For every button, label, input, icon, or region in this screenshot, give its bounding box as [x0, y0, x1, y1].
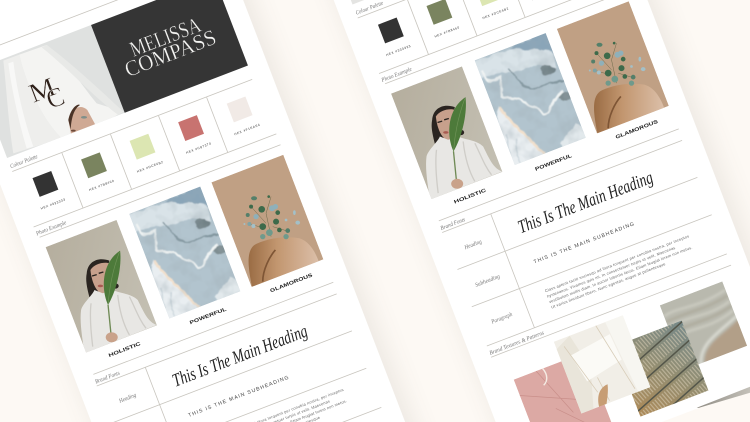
swatch: olive: HEX #7B8460 — [434, 25, 460, 39]
page fold shadow — [697, 387, 750, 408]
panel: right brand board page — [334, 0, 750, 422]
caption: holistic: HOLISTIC — [108, 341, 142, 359]
label: photo example: Photo Example — [35, 220, 68, 238]
texture: building facade — [632, 320, 708, 417]
rule under photo label — [385, 0, 626, 84]
paragraph sample: vestibulum mollis diam. In auctor lobortis lacus. Etiam feugiat lorem non metus. — [548, 245, 693, 304]
main heading sample: This Is The Main Heading — [170, 322, 311, 392]
label: brand textures and patterns: Brand Textures & Patterns — [489, 330, 546, 357]
swatch: blush: HEX #F1EAE6 — [234, 123, 261, 136]
swatch: charcoal — [30, 170, 66, 211]
logo block: Melissa Compass: COMPASS — [121, 24, 220, 82]
swatch: olive — [423, 0, 460, 39]
swatch: pale green — [471, 0, 510, 20]
swatch: pale green — [126, 132, 164, 174]
subheading sample: THIS IS THE MAIN SUBHEADING — [533, 221, 635, 265]
logo block: Melissa Compass: MELISSA — [126, 12, 204, 62]
swatch: pale green: HEX #DCE6B2 — [482, 6, 510, 20]
caption: glamorous: GLAMOROUS — [615, 119, 660, 141]
photo: back with eucalyptus — [212, 154, 324, 287]
row label: subheading: Subheading — [475, 274, 501, 289]
right page sheet — [176, 0, 750, 422]
texture: sea — [660, 282, 747, 364]
main heading sample: This Is The Main Heading — [515, 168, 656, 238]
swatch: charcoal: HEX #333333 — [40, 197, 66, 211]
swatch: blush — [223, 95, 261, 136]
photo: marble water — [474, 33, 586, 165]
caption: glamorous: GLAMOROUS — [269, 272, 314, 294]
texture: pink paper — [514, 362, 612, 422]
monogram MC: M — [25, 71, 60, 109]
photo: back with eucalyptus — [557, 2, 669, 134]
label: brand fonts: Brand Fonts — [440, 217, 467, 232]
rules above brand fonts — [438, 129, 683, 232]
swatch: olive — [78, 151, 115, 192]
caption: holistic: HOLISTIC — [453, 187, 488, 205]
logo heading rule — [0, 0, 209, 57]
eucalyptus leaves — [243, 195, 300, 239]
photo: woman with leaf — [46, 220, 157, 352]
background below right page — [662, 393, 750, 422]
subheading sample: THIS IS THE MAIN SUBHEADING — [188, 375, 290, 419]
paragraph sample: Ut varius tincidunt libero. Nunc egestas, augue at pellentesque — [550, 261, 666, 310]
caption: powerful: POWERFUL — [189, 307, 227, 326]
texture: cream fabric — [554, 315, 650, 414]
row label: heading: Heading — [118, 393, 137, 405]
swatch: rose: HEX #C87370 — [185, 141, 212, 155]
photo: veiled woman with monogram — [0, 25, 124, 158]
right page shadow — [180, 0, 750, 422]
row label: heading: Heading — [463, 239, 483, 252]
left page sheet — [0, 0, 499, 422]
swatch: charcoal: HEX #333333 — [386, 44, 412, 57]
monogram MC: C — [42, 81, 68, 115]
swatch: olive: HEX #7B8460 — [88, 179, 115, 192]
label: photo example: Photo Example — [380, 67, 413, 84]
row label: paragraph: Paragraph — [490, 312, 513, 326]
logo block top edge — [319, 0, 593, 4]
rule under photo label — [40, 145, 281, 237]
brand fonts table grid — [443, 140, 731, 357]
paragraph sample: hymenaeos. Vivamus quis mi. In consectetuer turpis ut velit. Maecenas — [546, 245, 676, 299]
paragraph sample — [199, 387, 350, 422]
swatch: pale green: HEX #DCE6B2 — [136, 160, 164, 174]
eucalyptus leaves — [589, 42, 646, 86]
monogram MC — [28, 78, 65, 107]
label: colour palette: Colour Palette — [10, 154, 39, 170]
panel: left brand board page — [0, 0, 414, 422]
left page shadow — [0, 0, 505, 422]
rules above brand fonts — [92, 282, 338, 386]
photo: woman with leaf — [391, 66, 502, 199]
caption: powerful: POWERFUL — [534, 153, 573, 173]
paragraph sample: Class aptent taciti sociosqu ad litora torquent per conubia nostra, per inceptos — [544, 233, 690, 293]
swatch: charcoal — [375, 16, 412, 57]
brand fonts table grid — [98, 294, 381, 422]
logo block: Melissa Compass — [91, 0, 248, 113]
panel: colour palette — [12, 78, 276, 227]
swatch: rose — [175, 114, 212, 155]
panel: colour palette — [358, 0, 622, 74]
label: brand fonts: Brand Fonts — [94, 370, 121, 385]
photo: marble water — [130, 186, 240, 318]
